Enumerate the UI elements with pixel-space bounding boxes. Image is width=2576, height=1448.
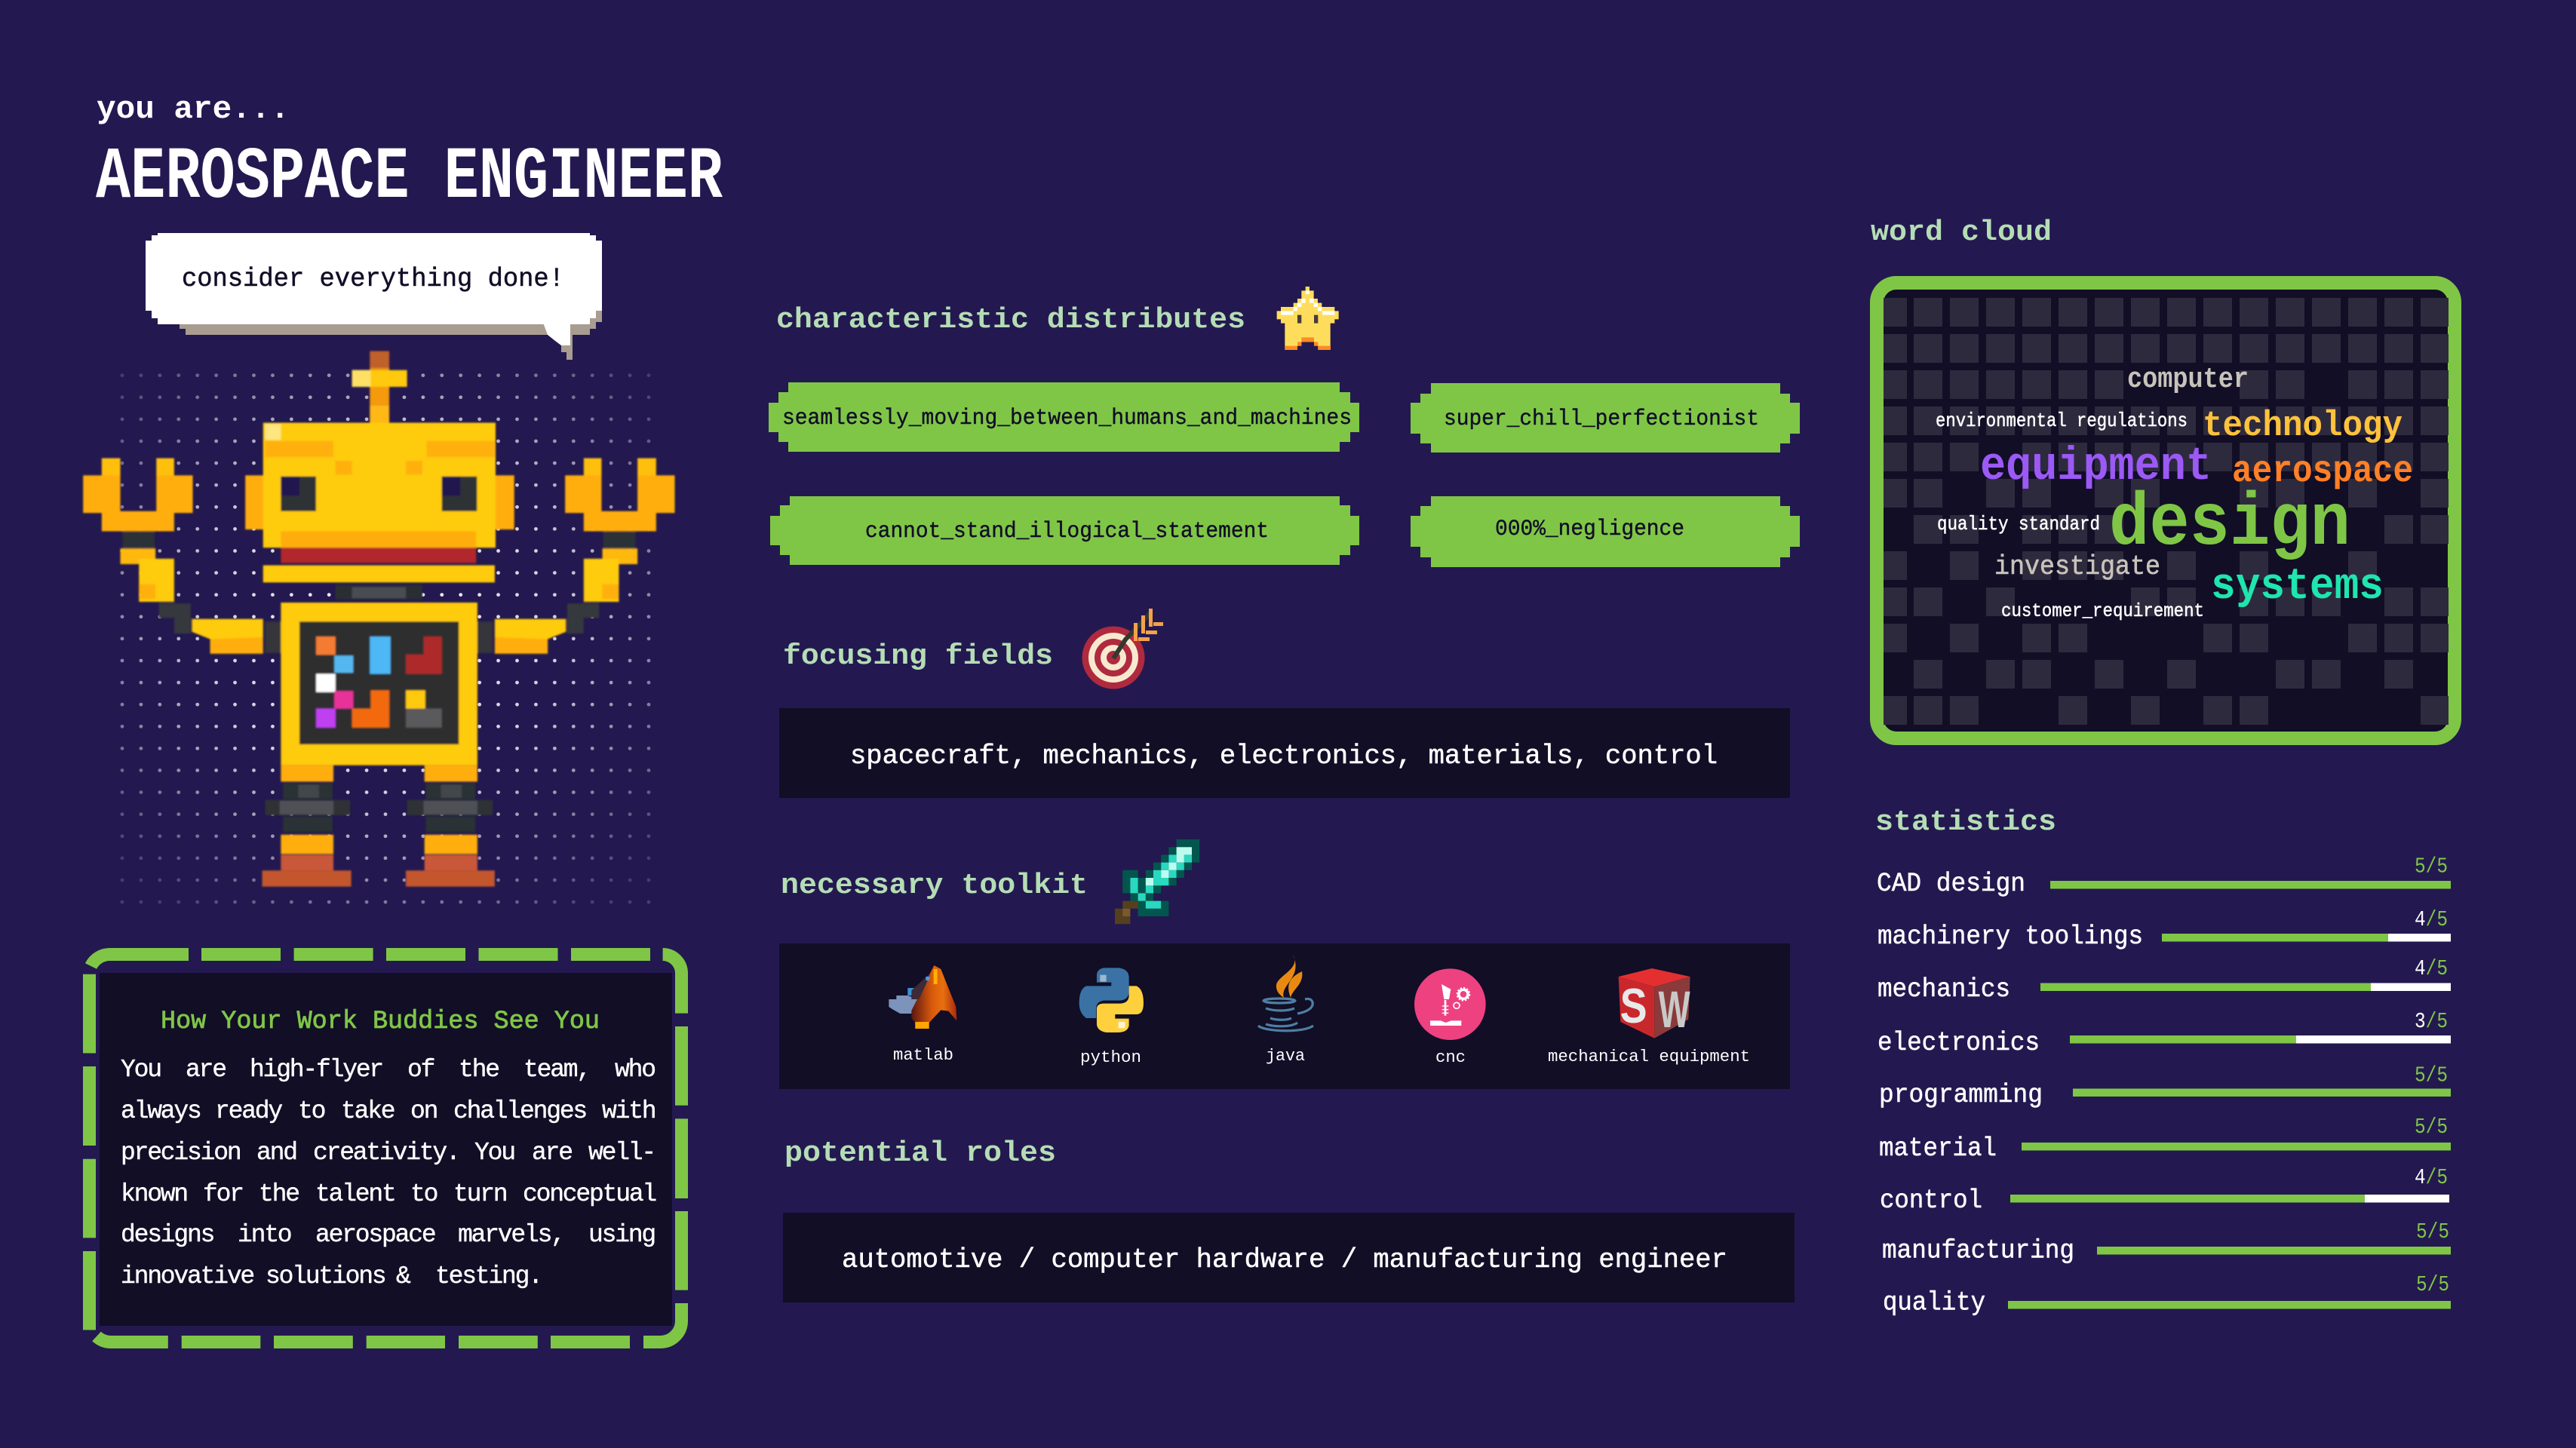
heading: statistics: statistics — [1875, 806, 2056, 839]
description text: are — [186, 1056, 238, 1084]
label: cnc: cnc — [1435, 1048, 1466, 1067]
tag: 000% negligence: 000%_negligence — [1495, 517, 1684, 542]
word: equipment: equipment — [1980, 440, 2212, 493]
statistic: electronics — [1878, 1009, 2451, 1058]
statistic: manufacturing: manufacturing — [1882, 1235, 2074, 1265]
statistic: programming: programming — [1879, 1080, 2043, 1110]
tag: cannot stand illogical statement — [770, 496, 1359, 565]
statistic: CAD design: CAD design — [1877, 869, 2025, 899]
speech bubble — [146, 233, 602, 360]
statistic: material — [1879, 1115, 2451, 1164]
description text: on — [410, 1097, 450, 1125]
statistic: quality — [1883, 1272, 2451, 1318]
dot grid behind robot — [113, 364, 658, 913]
description text: aerospace — [315, 1221, 448, 1249]
robot legs — [263, 784, 495, 887]
heading: potential roles: potential roles — [784, 1137, 1056, 1170]
description text: for — [203, 1180, 256, 1208]
statistic: programming — [1879, 1063, 2451, 1110]
icon: pixel sword — [1115, 839, 1199, 924]
tag: seamlessly moving: seamlessly_moving_between_humans_and_machines — [782, 406, 1352, 431]
icon: solidworks cube — [1619, 968, 1690, 1038]
description text: to — [410, 1180, 450, 1208]
icon: star — [1277, 287, 1339, 350]
description text: ready — [215, 1097, 295, 1125]
statistic: CAD design — [1877, 854, 2451, 899]
description text: with — [602, 1097, 655, 1125]
description text: are — [532, 1139, 585, 1167]
statistic: control — [1880, 1165, 2449, 1216]
description text: & — [396, 1262, 422, 1290]
statistic: mechanics: mechanics — [1878, 974, 2010, 1005]
word: investigate: investigate — [1994, 551, 2160, 582]
statistic: material: 5/5 — [2415, 1115, 2448, 1140]
robot head — [245, 423, 514, 600]
speech bubble: consider everything done! — [182, 264, 564, 294]
description text: high-flyer — [250, 1056, 396, 1084]
statistic: quality: quality — [1883, 1288, 1985, 1318]
label: python: python — [1080, 1048, 1141, 1067]
tag: super chill perfectionist: super_chill_perfectionist — [1444, 406, 1759, 432]
statistic: quality: 5/5 — [2416, 1272, 2449, 1297]
description text: creativity. — [313, 1139, 472, 1167]
icon: python — [1079, 968, 1144, 1032]
icon: target with arrow — [1082, 609, 1163, 689]
word: systems: systems — [2211, 563, 2384, 612]
description text: team, — [523, 1056, 603, 1084]
panel: how your work buddies see you — [89, 954, 682, 1342]
statistic: material: material — [1879, 1134, 1997, 1164]
title: AEROSPACE ENGINEER — [96, 137, 723, 219]
description text: take — [341, 1097, 407, 1125]
label: java: java — [1266, 1047, 1305, 1066]
description text: innovative — [121, 1262, 267, 1290]
statistic: control: 4/5 — [2415, 1165, 2448, 1190]
description text: known — [121, 1180, 201, 1208]
description text: testing. — [435, 1262, 542, 1290]
robot antenna — [352, 351, 407, 423]
statistic: manufacturing: 5/5 — [2416, 1219, 2449, 1244]
description text: talent — [315, 1180, 408, 1208]
description text: always — [121, 1097, 213, 1125]
icon: cnc — [1414, 968, 1486, 1040]
panel heading: How Your Work Buddies See You — [161, 1008, 600, 1036]
icon: java — [1258, 955, 1313, 1031]
statistic: manufacturing — [1882, 1219, 2451, 1265]
heading: focusing fields: focusing fields — [783, 640, 1053, 673]
icon: matlab — [889, 965, 956, 1029]
heading: characteristic distributes: characteristic distributes — [776, 304, 1245, 336]
panel: potential roles — [783, 1213, 1795, 1302]
icon: solidworks cube: W — [1659, 981, 1690, 1038]
description text: You — [474, 1139, 527, 1167]
description text: precision — [121, 1139, 253, 1167]
description text: solutions — [266, 1262, 398, 1290]
word: technology: technology — [2203, 406, 2403, 446]
description text: turn — [453, 1180, 520, 1208]
statistic: mechanics — [1878, 956, 2451, 1005]
word: computer: computer — [2127, 364, 2249, 396]
statistic: machinery toolings: 4/5 — [2415, 907, 2448, 932]
word: quality standard: quality standard — [1937, 513, 2100, 535]
panel: word cloud — [1877, 283, 2455, 738]
word: aerospace: aerospace — [2232, 450, 2413, 493]
word: environmental regulations: environmental regulations — [1936, 410, 2188, 432]
dashed border — [89, 954, 682, 1342]
icon: solidworks cube: S — [1620, 978, 1647, 1033]
tag: super chill perfectionist — [1411, 383, 1800, 452]
panel: necessary toolkit — [779, 943, 1790, 1089]
tag: 000% negligence — [1411, 496, 1800, 567]
description text: using — [588, 1221, 655, 1249]
description text: well- — [588, 1139, 655, 1167]
heading: word cloud: word cloud — [1871, 216, 2052, 249]
word: customer requirement: customer_requirement — [2001, 600, 2204, 622]
tile grid background — [1884, 312, 2449, 710]
description text: the — [459, 1056, 511, 1084]
statistic: machinery toolings: machinery toolings — [1878, 922, 2143, 952]
panel: focusing fields — [779, 708, 1790, 798]
statistic: machinery toolings — [1878, 907, 2451, 952]
panel: focusing fields: spacecraft, mechanics, electronics, materials, control — [850, 741, 1718, 772]
description text: designs — [121, 1221, 227, 1249]
description text: into — [238, 1221, 304, 1249]
description text: to — [298, 1097, 338, 1125]
label: mechanical equipment: mechanical equipment — [1548, 1048, 1750, 1066]
statistic: electronics: 3/5 — [2415, 1009, 2448, 1034]
word: design: design — [2109, 483, 2350, 566]
panel: potential roles: automotive / computer hardware / manufacturing engineer — [842, 1244, 1727, 1275]
statistic: programming: 5/5 — [2415, 1063, 2448, 1088]
tag: cannot stand illogical statement: cannot_stand_illogical_statement — [865, 519, 1269, 545]
robot mascot — [83, 351, 675, 887]
tag: seamlessly moving — [769, 382, 1359, 452]
robot right arm — [477, 459, 675, 654]
statistic: CAD design: 5/5 — [2415, 854, 2448, 879]
label: matlab: matlab — [893, 1046, 953, 1065]
statistic: control: control — [1880, 1186, 1982, 1216]
robot left arm — [83, 459, 281, 654]
description text: conceptual — [523, 1180, 656, 1208]
statistic: mechanics: 4/5 — [2415, 956, 2448, 981]
heading: necessary toolkit: necessary toolkit — [781, 870, 1088, 902]
eyebrow: you are...: you are... — [97, 91, 290, 127]
description text: You — [121, 1056, 173, 1084]
robot body with screen — [281, 603, 477, 781]
description text: the — [259, 1180, 312, 1208]
description text: and — [256, 1139, 309, 1167]
description text: who — [615, 1056, 655, 1084]
statistic: electronics: electronics — [1878, 1028, 2040, 1058]
description text — [121, 1056, 656, 1290]
description text: of — [407, 1056, 447, 1084]
description text: marvels, — [458, 1221, 577, 1249]
description text: challenges — [453, 1097, 600, 1125]
